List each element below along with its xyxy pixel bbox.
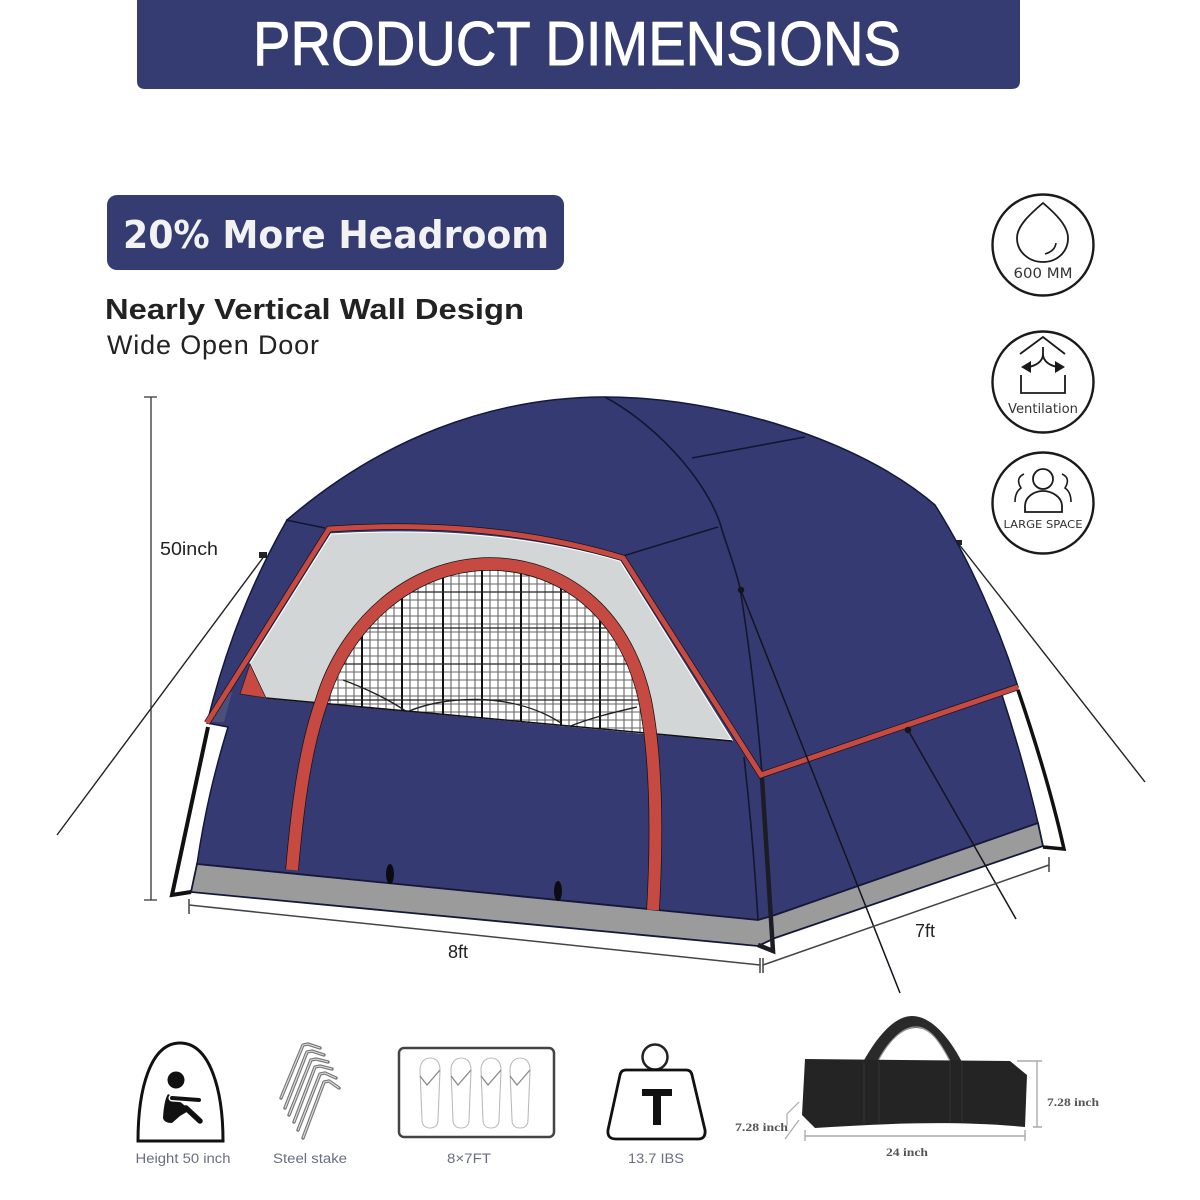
corner badge xyxy=(240,664,266,698)
height dimension: 50 inch: 50inch xyxy=(160,539,218,559)
icon: 600 mm waterproof: 600 MM xyxy=(1014,266,1072,282)
bag dimensions: 7.28 inch xyxy=(1047,1095,1099,1109)
icon: ventilation xyxy=(992,332,1094,432)
icon: height 50 inch: Height 50 inch xyxy=(136,1151,230,1166)
icon: large space xyxy=(992,452,1094,554)
icon: large space: LARGE SPACE xyxy=(1004,518,1083,531)
door zips xyxy=(386,864,562,901)
icon: ventilation: Ventilation xyxy=(1008,402,1078,417)
ground band xyxy=(191,823,1043,946)
subheading text: Wide Open Door xyxy=(107,330,319,360)
width dimension: 8ft: 8ft xyxy=(448,942,468,962)
bag dimensions: 7.28 inch xyxy=(735,1120,788,1134)
front guy lines xyxy=(738,588,1016,993)
icon: height 50 inch xyxy=(136,1043,230,1166)
subheading text: Nearly Vertical Wall Design xyxy=(105,294,524,326)
height dimension: 50 inch xyxy=(144,397,218,900)
subheading text xyxy=(105,294,524,360)
left and right guy lines xyxy=(57,540,1145,835)
right pole xyxy=(1018,690,1064,849)
door arch xyxy=(292,564,655,910)
icon: weight 13.7 lbs xyxy=(608,1044,705,1166)
front red binding xyxy=(207,527,1018,775)
bag dimensions: 24 inch xyxy=(886,1145,928,1159)
width dimension: 8ft xyxy=(189,899,760,973)
left pole xyxy=(172,727,208,895)
icon: 600 mm waterproof xyxy=(992,194,1094,296)
badge: 20% more headroom xyxy=(107,195,564,270)
mesh window xyxy=(328,570,644,732)
title banner xyxy=(137,0,1020,89)
icon: 8x7ft floor with sleeping bags: 8×7FT xyxy=(447,1151,491,1166)
badge: 20% more headroom: 20% More Headroom xyxy=(123,213,549,257)
tent illustration xyxy=(57,397,1145,993)
front corner pole xyxy=(758,778,773,951)
tent body xyxy=(197,397,1038,920)
icon: steel stake xyxy=(273,1044,347,1166)
icon: weight 13.7 lbs: 13.7 IBS xyxy=(628,1151,684,1166)
icon: steel stake: Steel stake xyxy=(273,1151,347,1166)
title banner: PRODUCT DIMENSIONS xyxy=(253,10,901,79)
side flap xyxy=(209,692,232,722)
icon: 8x7ft floor with sleeping bags xyxy=(399,1048,554,1166)
depth dimension: 7ft xyxy=(763,857,1049,973)
mesh bottom edge xyxy=(266,698,732,741)
depth dimension: 7ft: 7ft xyxy=(915,921,935,941)
roof seams xyxy=(286,397,805,920)
bag dimensions xyxy=(735,1061,1099,1159)
icon: carry bag xyxy=(802,1016,1027,1128)
gray window panel xyxy=(250,532,732,740)
